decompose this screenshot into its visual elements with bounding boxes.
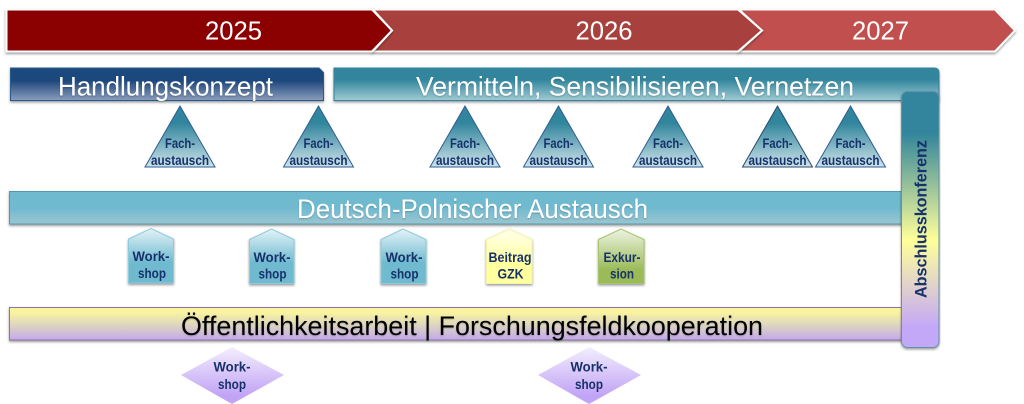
triangle: Fachaustausch 5: austausch [639,152,697,168]
triangle: Fachaustausch 6: austausch [748,152,806,168]
chevron: 2026 [373,10,762,52]
chevron: 2025 [6,10,392,52]
diamond: Workshop 1: shop [218,376,246,392]
pentagon: Workshop 3 [381,229,426,284]
triangle: Fachaustausch 4: austausch [530,152,588,168]
diamond: Workshop 2: Work- [570,358,608,374]
bar: Öffentlichkeitsarbeit | Forschungsfeldkooperation [10,308,910,341]
triangle: Fachaustausch 5 [633,106,703,168]
pentagon: Workshop 1 [128,228,174,283]
triangle: Fachaustausch 3: Fach- [450,135,480,151]
pentagon: Exkursion: Exkur- [604,249,641,265]
pentagon: Workshop 2: shop [258,266,286,282]
triangle: Fachaustausch 2: Fach- [304,135,334,151]
pentagon: Exkursion [598,229,644,284]
triangle: Fachaustausch 7: Fach- [836,135,866,151]
triangle: Fachaustausch 6 [742,106,812,168]
pentagon: Workshop 3: shop [390,266,418,282]
chevron: 2027 [739,10,1015,52]
pentagon: Beitrag GZK: Beitrag [488,249,532,265]
bar: Deutsch-Polnischer Austausch: Deutsch-Polnischer Austausch [297,194,648,224]
triangle: Fachaustausch 5: Fach- [653,135,683,151]
triangle: Fachaustausch 2 [284,106,354,168]
triangle: Fachaustausch 7: austausch [822,152,880,168]
pentagon: Workshop 3: Work- [386,249,423,265]
triangle: Fachaustausch 1: Fach- [165,135,195,151]
diamond: Workshop 2 [538,347,641,404]
bar: Öffentlichkeitsarbeit | Forschungsfeldkooperation: Öffentlichkeitsarbeit | Forschungsfeldkooperation [181,311,763,341]
triangle: Fachaustausch 3 [430,106,500,168]
bar: Vermitteln, Sensibilisieren, Vernetzen: Vermitteln, Sensibilisieren, Vernetzen [416,72,854,102]
bar: Handlungskonzept [10,68,324,102]
pentagon: Workshop 2 [250,229,294,284]
bar: Vermitteln, Sensibilisieren, Vernetzen [334,68,939,102]
pentagon: Workshop 1: Work- [132,248,170,264]
diamond: Workshop 2: shop [575,376,603,392]
diamond: Workshop 1: Work- [214,358,251,374]
triangle: Fachaustausch 4 [524,106,594,168]
chevron: 2027: 2027 [852,16,909,46]
pentagon: Workshop 1: shop [138,265,166,281]
diamond: Workshop 1 [181,347,284,404]
triangle: Fachaustausch 3: austausch [436,152,494,168]
triangle: Fachaustausch 2: austausch [290,152,348,168]
triangle: Fachaustausch 1 [145,106,215,168]
chevron: 2025: 2025 [205,16,262,46]
triangle: Fachaustausch 6: Fach- [762,135,793,151]
pentagon: Beitrag GZK [486,229,532,284]
triangle: Fachaustausch 1: austausch [151,152,209,168]
triangle: Fachaustausch 7 [816,106,886,168]
chevron: 2026: 2026 [576,16,632,46]
triangle: Fachaustausch 4: Fach- [544,135,574,151]
vertical bar: Abschlusskonferenz: Abschlusskonferenz [912,140,930,298]
pentagon: Exkursion: sion [610,266,634,282]
bar: Handlungskonzept: Handlungskonzept [58,72,274,102]
vertical bar: Abschlusskonferenz [902,92,939,348]
pentagon: Beitrag GZK: GZK [498,266,524,282]
bar: Deutsch-Polnischer Austausch [10,192,910,224]
pentagon: Workshop 2: Work- [254,249,291,265]
